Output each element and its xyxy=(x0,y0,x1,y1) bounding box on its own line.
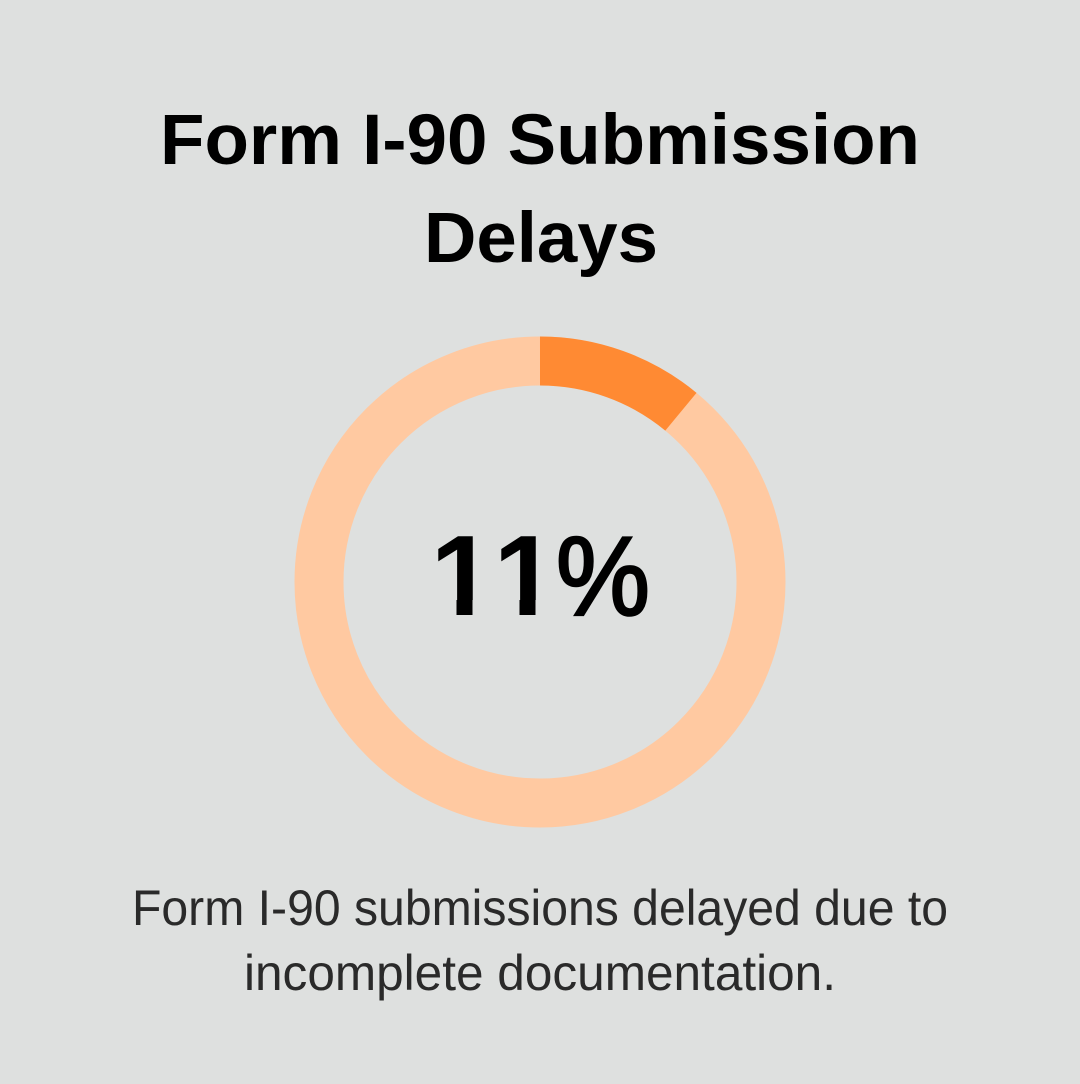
title: Delays xyxy=(424,199,658,278)
title: Form I-90 Submission xyxy=(160,101,920,180)
title xyxy=(160,101,920,278)
description text xyxy=(132,880,948,1001)
center percentage value xyxy=(424,513,650,640)
center percentage value: % xyxy=(556,514,650,639)
description text: Form I-90 submissions delayed due to xyxy=(132,880,948,936)
donut track xyxy=(319,361,761,803)
center percentage value: 1 xyxy=(430,513,494,640)
center percentage value: 1 xyxy=(494,513,557,640)
donut highlighted segment xyxy=(540,361,681,412)
donut chart: 11 percent xyxy=(319,361,761,803)
description text: incomplete documentation. xyxy=(244,945,836,1001)
